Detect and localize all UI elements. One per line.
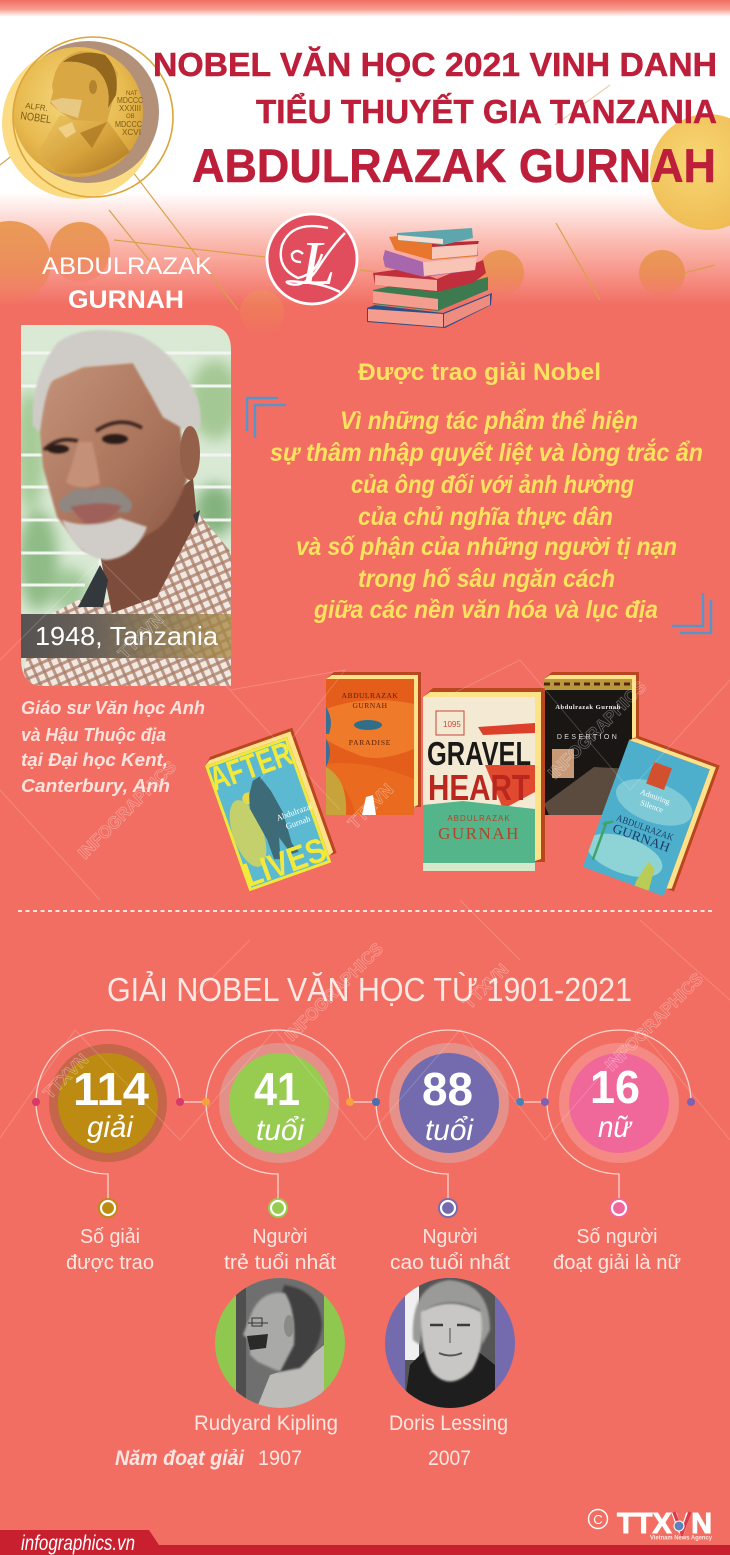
icon: nobel medal: MDCCC — [115, 120, 142, 129]
watermark text: TTXVN — [344, 780, 397, 833]
book: Gravel Heart: GURNAH — [438, 824, 520, 843]
quote text: của ông đối với ảnh hưởng — [351, 471, 634, 499]
stat: oldest 88: 88 — [422, 1063, 473, 1115]
stat: youngest 41: trẻ tuổi nhất — [224, 1252, 336, 1274]
stat: 114 prizes: 114 — [73, 1063, 149, 1115]
watermark text: INFOGRAPHICS — [544, 677, 650, 783]
stat: 114 prizes: giải — [87, 1111, 134, 1144]
stat: 16 women: nữ — [598, 1111, 633, 1144]
icon: quote bracket top-left — [247, 398, 286, 438]
caption: professor: và Hậu Thuộc địa — [21, 725, 166, 745]
section heading: GIẢI NOBEL VĂN HỌC TỪ 1901-2021 — [107, 971, 632, 1008]
watermark text: INFOGRAPHICS — [74, 757, 180, 863]
book: Admiring Silence: ABDULRAZAK — [615, 814, 675, 844]
stat: oldest 88: Người — [422, 1226, 478, 1248]
quote text: giữa các nền văn hóa và lục địa — [313, 596, 658, 624]
book: Paradise — [326, 672, 421, 815]
icon: nobel medal: XXXIII — [119, 104, 141, 113]
book: Admiring Silence: GURNAH — [611, 820, 672, 855]
copyright and TTXVN logo: Vietnam News Agency — [650, 1536, 713, 1542]
icon: quote bracket bottom-right — [672, 593, 711, 633]
watermark text: TTXVN — [459, 960, 512, 1013]
watermark text — [39, 610, 707, 1103]
book: Afterlives — [203, 728, 340, 895]
book: Admiring Silence: Silence — [639, 798, 665, 815]
portrait: Doris Lessing — [385, 1270, 515, 1410]
stat: oldest 88 — [372, 1030, 545, 1274]
icon: nobel medal: MDCCC — [117, 96, 143, 105]
icon: stack of books — [367, 228, 492, 328]
stat: youngest 41: tuổi — [256, 1114, 305, 1147]
winner names and years: 1907 — [258, 1447, 302, 1470]
footer bar: infographics.vn — [21, 1532, 135, 1555]
watermark text: TTXVN — [39, 1050, 92, 1103]
stat: youngest 41 — [202, 1030, 376, 1274]
book: Desertion: Abdulrazak Gurnah — [555, 704, 621, 711]
watermark lattice — [0, 560, 730, 1140]
copyright and TTXVN logo: C — [593, 1512, 603, 1527]
icon: nobel medal — [2, 37, 173, 199]
stat: oldest 88: tuổi — [425, 1114, 474, 1147]
quote text: Được trao giải Nobel — [358, 359, 601, 386]
book: Gravel Heart: GRAVEL — [427, 735, 531, 772]
icon: script L logo: L — [300, 230, 335, 298]
quote text: trong hố sâu ngăn cách — [358, 565, 615, 593]
title — [153, 46, 717, 192]
icon: nobel medal: OB — [126, 114, 135, 120]
stat: youngest 41: Người — [252, 1226, 308, 1248]
book: Desertion — [544, 672, 639, 815]
icon: nobel medal: NAT — [126, 91, 138, 97]
book: Gravel Heart: HEART — [428, 767, 530, 808]
book: Afterlives: LIVES — [239, 831, 331, 895]
header gradient background — [0, 0, 730, 305]
watermark text: INFOGRAPHICS — [281, 939, 387, 1045]
winner names and years: 2007 — [428, 1447, 471, 1470]
stat: 16 women: đoạt giải là nữ — [553, 1252, 681, 1274]
portrait: Rudyard Kipling — [215, 1270, 345, 1410]
watermark text: INFOGRAPHICS — [601, 969, 707, 1075]
copyright and TTXVN logo: TTXVN — [617, 1508, 712, 1540]
name: Abdulrazak Gurnah: ABDULRAZAK — [42, 253, 212, 280]
winner names and years: Doris Lessing — [389, 1412, 508, 1435]
book: Afterlives: AFTER — [204, 735, 297, 799]
book: Paradise: ABDULRAZAK — [342, 691, 398, 700]
book: Afterlives: Abdulrazak — [275, 800, 316, 823]
winner names and years: Rudyard Kipling — [194, 1412, 338, 1435]
quote text: và số phận của những người tị nạn — [296, 533, 677, 561]
quote text: Vì những tác phẩm thể hiện — [340, 407, 638, 435]
stat: 16 women: Số người — [576, 1226, 658, 1248]
caption: professor: tại Đại học Kent, — [21, 750, 168, 770]
title: TIỂU THUYẾT GIA TANZANIA — [256, 93, 717, 130]
book: Afterlives: Gurnah — [284, 813, 312, 831]
decorative circles and gold lines — [0, 85, 730, 334]
icon: script L logo — [267, 214, 357, 304]
portrait photo: 1948, Tanzania — [35, 621, 219, 651]
stat: 16 women — [541, 1030, 695, 1274]
title: NOBEL VĂN HỌC 2021 VINH DANH — [153, 46, 717, 83]
book: Gravel Heart: 1095 — [443, 720, 461, 729]
book: Paradise: PARADISE — [349, 738, 391, 747]
caption: professor — [21, 698, 205, 796]
name: Abdulrazak Gurnah: GURNAH — [68, 286, 184, 314]
book: Admiring Silence: Admiring — [639, 787, 671, 806]
portrait photo — [14, 325, 241, 686]
footer bar — [0, 1530, 730, 1555]
quote text: của chủ nghĩa thực dân — [358, 503, 613, 531]
quote text: sự thâm nhập quyết liệt và lòng trắc ẩn — [270, 438, 703, 467]
book: Gravel Heart — [423, 688, 545, 871]
winner names and years — [115, 1412, 508, 1470]
winner names and years: Năm đoạt giải — [115, 1447, 245, 1470]
icon: nobel medal: XCVI — [122, 128, 141, 137]
name: Abdulrazak Gurnah — [42, 253, 212, 314]
icon: nobel medal: NOBEL — [20, 110, 52, 126]
quote text — [270, 359, 703, 624]
stat: oldest 88: cao tuổi nhất — [390, 1252, 510, 1274]
stat: 16 women: 16 — [590, 1061, 640, 1113]
caption: professor: Giáo sư Văn học Anh — [21, 698, 205, 718]
book: Desertion: DESERTION — [557, 734, 619, 741]
book: Admiring Silence — [578, 732, 720, 899]
watermark text: TTXVN — [114, 610, 167, 663]
book: Paradise: GURNAH — [352, 701, 388, 710]
caption: professor: Canterbury, Anh — [21, 776, 170, 796]
stat: 114 prizes: được trao — [66, 1252, 154, 1274]
book: Gravel Heart: ABDULRAZAK — [447, 814, 511, 823]
icon: nobel medal: ALFR. — [25, 101, 48, 113]
stat: 114 prizes: Số giải — [80, 1226, 140, 1248]
title: ABDULRAZAK GURNAH — [192, 139, 716, 192]
stat: youngest 41: 41 — [254, 1063, 300, 1115]
stat: 114 prizes — [32, 1030, 206, 1274]
